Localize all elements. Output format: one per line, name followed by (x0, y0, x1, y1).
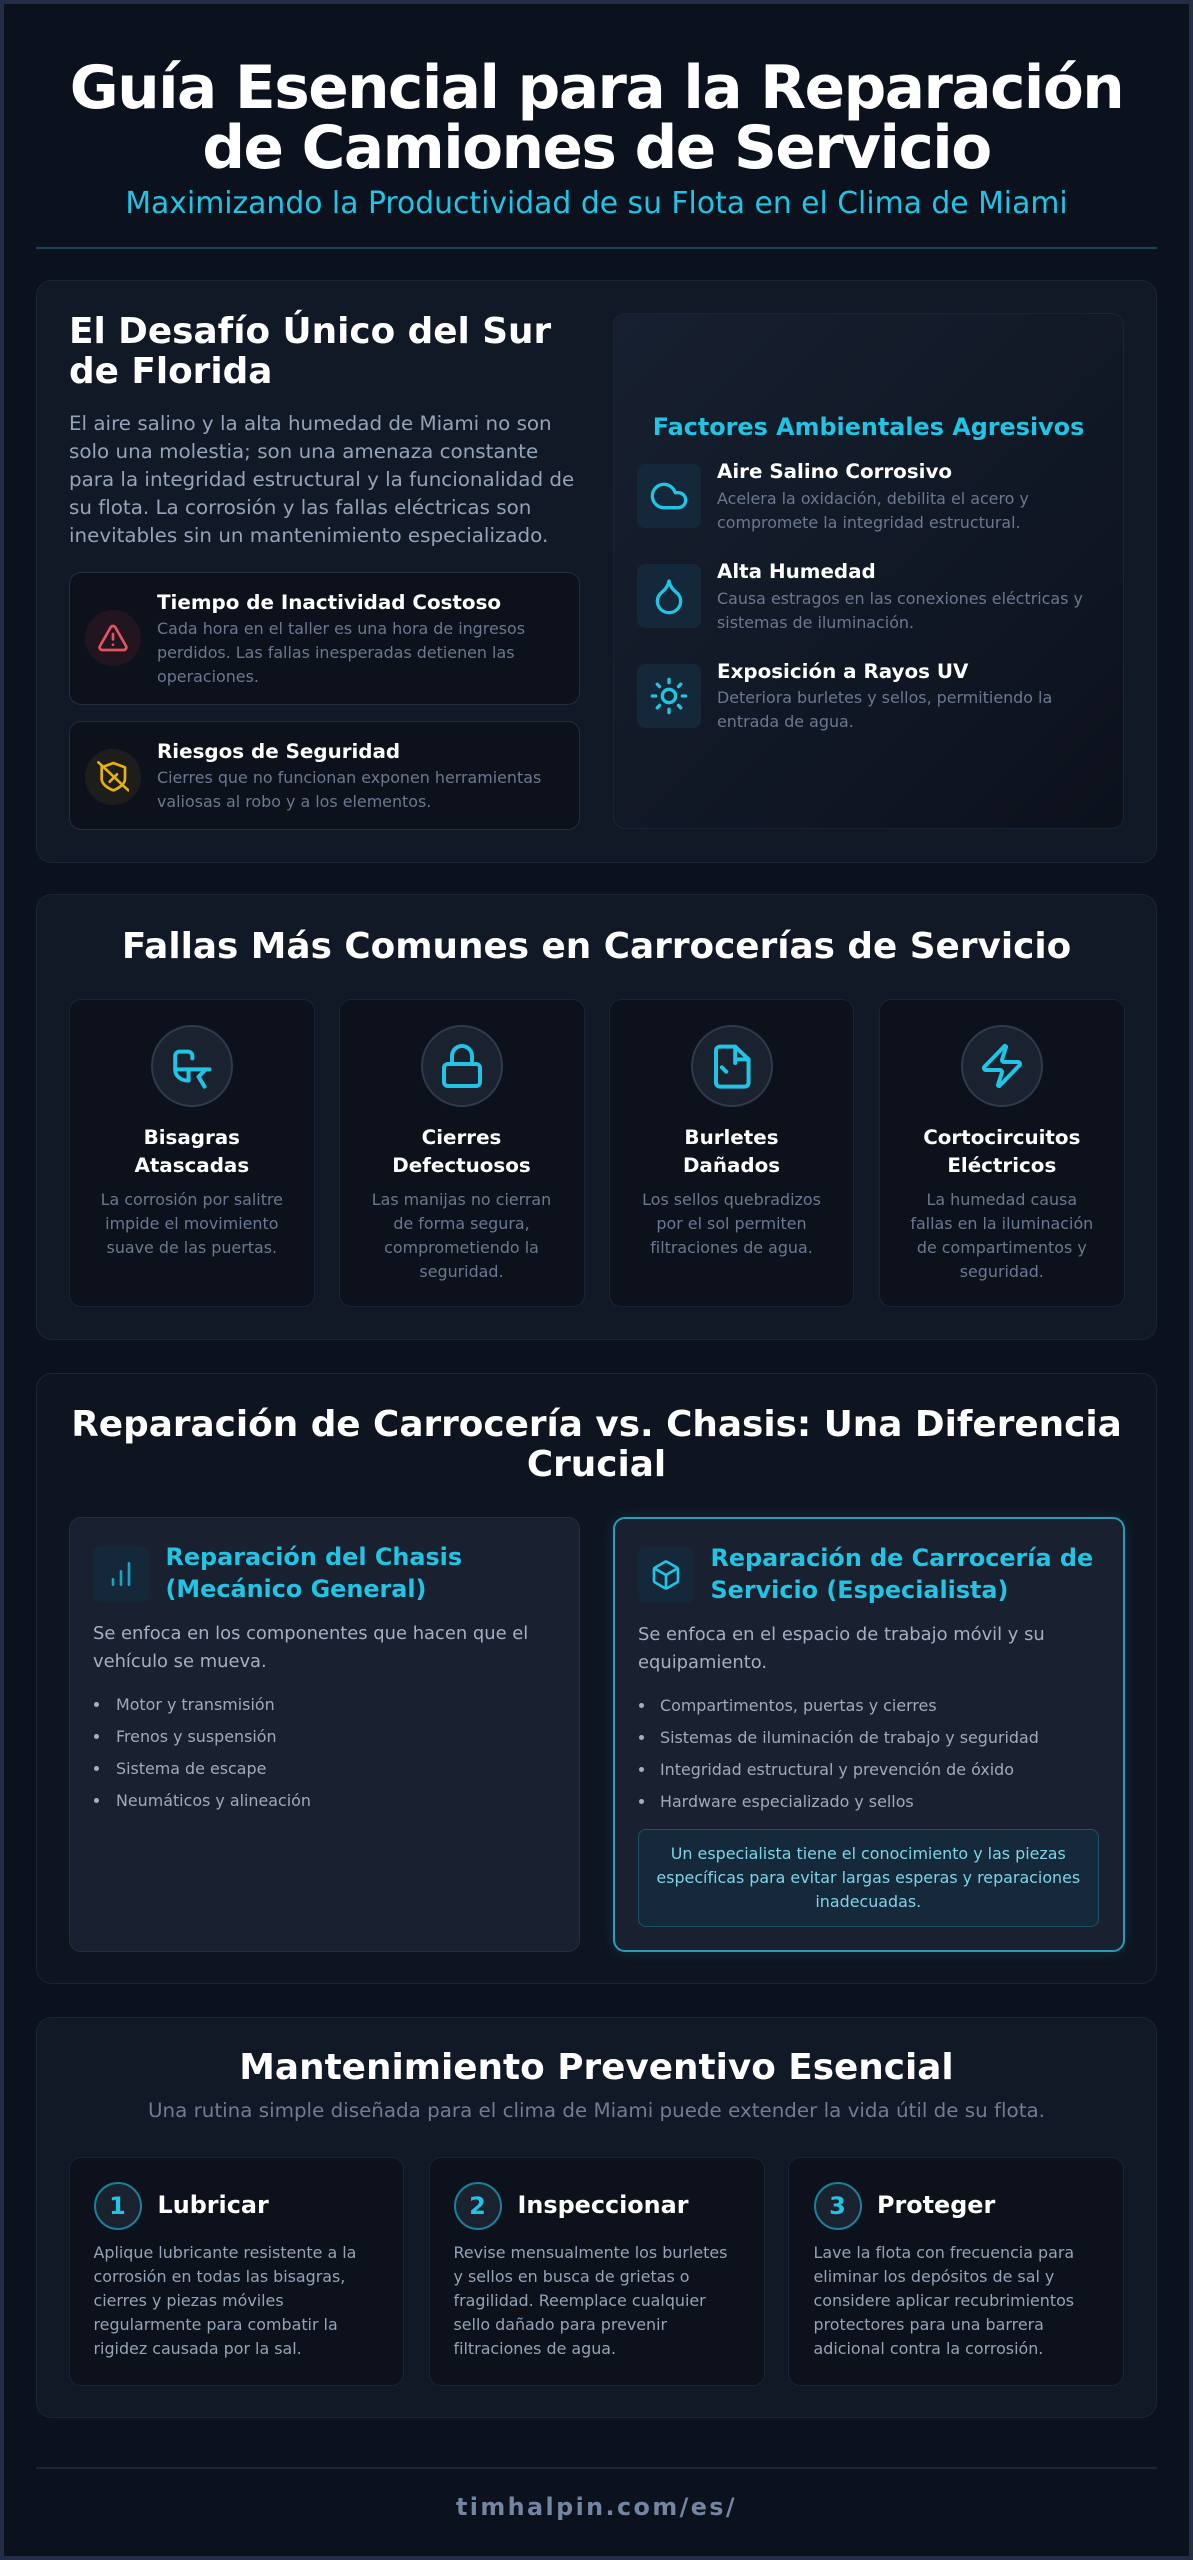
step number 1 (94, 2182, 142, 2230)
step text (454, 2243, 727, 2358)
failure title: Dañados (683, 1154, 780, 1177)
chassis text (93, 1623, 528, 1672)
step text: filtraciones de agua. (454, 2339, 616, 2358)
step text: cierres y piezas móviles (94, 2291, 284, 2310)
step number 1: 1 (109, 2192, 126, 2220)
failure title: Cortocircuitos (923, 1126, 1080, 1149)
header title (70, 54, 1123, 183)
failure text: seguridad. (960, 1262, 1044, 1280)
panel: Carrocería vs. Chasis (36, 1373, 1157, 1984)
failure title (392, 1126, 531, 1177)
alert text: operaciones. (157, 667, 259, 686)
failure text: Las manijas no cierran (372, 1190, 551, 1208)
callout text: específicas para evitar largas esperas y reparaciones (656, 1868, 1080, 1887)
chassis list: Motor y transmisión (116, 1695, 275, 1714)
header title: Guía Esencial para la Reparación (70, 54, 1123, 123)
step title: Proteger (877, 2190, 995, 2218)
card: Reparación de Carrocería (612, 1517, 1124, 1952)
step text: corrosión en todas las bisagras, (94, 2267, 345, 2286)
chassis text: vehículo se mueva. (93, 1651, 267, 1672)
callout (638, 1829, 1098, 1927)
alert text: Cada hora en el taller es una hora de ingresos (157, 619, 525, 638)
intro text: para la integridad estructural y la funcionalidad de (69, 468, 574, 491)
alert title: Riesgos de Seguridad (157, 740, 400, 762)
alert text (157, 619, 525, 686)
factor text: Deteriora burletes y sellos, permitiendo la (717, 688, 1052, 707)
failure text: Los sellos quebradizos (642, 1190, 821, 1208)
icon: bar chart (93, 1546, 149, 1602)
step text: Lave la flota con frecuencia para (814, 2243, 1074, 2262)
step text: fragilidad. Reemplace cualquier (454, 2291, 706, 2310)
factor title: Aire Salino Corrosivo (717, 460, 952, 483)
failure title: Bisagras (144, 1126, 240, 1149)
heading: Fallas Más Comunes: Fallas Más Comunes en Carrocerías de Servicio (122, 926, 1071, 967)
step text (94, 2243, 356, 2358)
heading: Carrocería vs. Chasis: Reparación de Carrocería vs. Chasis: Una Diferencia (71, 1404, 1122, 1445)
card: Reparación del Chasis (69, 1517, 580, 1952)
intro text: inevitables sin un mantenimiento especializado. (69, 524, 548, 547)
specialist text: Se enfoca en el espacio de trabajo móvil y su (638, 1624, 1045, 1645)
failure text: comprometiendo la (384, 1238, 539, 1256)
alert text: valiosas al robo y a los elementos. (157, 792, 431, 811)
failure title (683, 1126, 780, 1177)
failure title: Cierres (422, 1126, 501, 1149)
step text: regularmente para combatir la (94, 2315, 338, 2334)
card: Cierres Defectuosos (339, 999, 584, 1307)
failure text: fallas en la iluminación (910, 1214, 1093, 1232)
heading: El Desafío Único del Sur de Florida (69, 310, 552, 392)
specialist list: Sistemas de iluminación de trabajo y seguridad (660, 1728, 1039, 1747)
alert text: Cierres que no funcionan exponen herramientas (157, 768, 541, 787)
failure text: de forma segura, (393, 1214, 530, 1232)
specialist list (660, 1696, 1039, 1811)
footer url: timhalpin.com/es/ (456, 2493, 737, 2521)
failure text: La corrosión por salitre (101, 1190, 283, 1208)
chassis title (166, 1542, 462, 1602)
specialist title (710, 1544, 1093, 1604)
chassis text: Se enfoca en los componentes que hacen que el (93, 1623, 528, 1644)
factor text (717, 489, 1029, 532)
failure title (923, 1126, 1080, 1177)
heading: Factores Ambientales Agresivos: Factores Ambientales Agresivos (653, 413, 1084, 441)
alert text: perdidos. Las fallas inesperadas detienen las (157, 643, 514, 662)
icon: lightning bolt (961, 1025, 1043, 1107)
alert card: Tiempo de Inactividad (69, 572, 580, 705)
step text: y sellos en busca de grietas o (454, 2267, 690, 2286)
failure text (372, 1190, 551, 1280)
specialist title: Reparación de Carrocería de (710, 1544, 1093, 1572)
failure title: Defectuosos (392, 1154, 531, 1177)
failure text (101, 1190, 283, 1256)
panel: El Desafío Único (36, 280, 1157, 863)
chassis list: Frenos y suspensión (116, 1727, 277, 1746)
failure text: de compartimentos y (917, 1238, 1087, 1256)
card: Cortocircuitos Eléctricos (879, 999, 1124, 1307)
card: Lubricar (69, 2157, 404, 2386)
heading: Carrocería vs. Chasis (71, 1404, 1122, 1485)
step number 2 (454, 2182, 502, 2230)
failure text: impide el movimiento (105, 1214, 278, 1232)
failure title: Eléctricos (947, 1154, 1056, 1177)
specialist title: Servicio (Especialista) (710, 1576, 1008, 1604)
icon: cloud (637, 464, 701, 528)
failure text: filtraciones de agua. (650, 1238, 813, 1256)
chassis list: Sistema de escape (116, 1759, 266, 1778)
panel: Factores Ambientales (613, 313, 1124, 829)
header title: de Camiones de Servicio (202, 114, 991, 183)
heading: El Desafío Único del Sur de Florida: de Florida (69, 350, 272, 392)
icon: lock (420, 1025, 502, 1107)
specialist list: Compartimentos, puertas y cierres (660, 1696, 937, 1715)
step text: eliminar los depósitos de sal y (814, 2267, 1054, 2286)
icon: hinge (151, 1025, 233, 1107)
alert title: Tiempo de Inactividad Costoso (157, 590, 501, 614)
card: Inspeccionar (428, 2157, 764, 2386)
factor text: entrada de agua. (717, 712, 854, 731)
failure title (134, 1126, 249, 1177)
step text: protectores para una barrera (814, 2315, 1044, 2334)
alert text (157, 768, 541, 811)
intro text (69, 412, 574, 547)
chassis title: (Mecánico General) (166, 1574, 426, 1602)
specialist text: equipamiento. (638, 1652, 767, 1673)
icon: droplet (637, 564, 701, 628)
chassis title: Reparación del Chasis (166, 1542, 462, 1570)
factor text (717, 589, 1083, 632)
specialist text (638, 1624, 1045, 1673)
card: Bisagras Atascadas (69, 999, 314, 1307)
step text: Aplique lubricante resistente a la (94, 2243, 356, 2262)
step text: Revise mensualmente los burletes (454, 2243, 727, 2262)
panel: Fallas Más Comunes (36, 894, 1157, 1340)
intro text: El aire salino y la alta humedad de Miami no son (69, 412, 552, 435)
failure text: por el sol permiten (656, 1214, 807, 1232)
subheading: Una rutina simple diseñada para el clima de Miami puede extender la vida útil de su flota. (148, 2099, 1045, 2122)
step number 3: 3 (829, 2192, 846, 2220)
heading: El Desafío Único del Sur de Florida: El Desafío Único del Sur (69, 310, 551, 352)
heading: Carrocería vs. Chasis: Crucial (527, 1444, 666, 1485)
step text: adicional contra la corrosión. (814, 2339, 1043, 2358)
factor text: Causa estragos en las conexiones eléctricas y (717, 589, 1083, 608)
alert card: Riesgos de Seguridad (69, 721, 580, 830)
factor title: Alta Humedad (717, 560, 876, 583)
chassis list: Neumáticos y alineación (116, 1791, 311, 1810)
header subtitle: Maximizando la Productividad de su Flota en el Clima de Miami (125, 186, 1068, 221)
failure title: Burletes (684, 1126, 779, 1149)
icon: box (638, 1547, 694, 1603)
step text: considere aplicar recubrimientos (814, 2291, 1074, 2310)
card: Burletes Dañados (608, 999, 854, 1307)
failure text (642, 1190, 821, 1256)
factor text: compromete la integridad estructural. (717, 513, 1021, 532)
intro text: solo una molestia; son una amenaza constante (69, 440, 538, 463)
intro text: su flota. La corrosión y las fallas eléctricas son (69, 496, 531, 519)
factor title: Exposición a Rayos UV (717, 660, 968, 682)
icon: warning triangle (85, 610, 141, 666)
step number 3 (814, 2182, 862, 2230)
callout text (656, 1844, 1080, 1911)
step text: sello dañado para prevenir (454, 2315, 667, 2334)
specialist list: Integridad estructural y prevención de óxido (660, 1760, 1014, 1779)
card: Proteger (788, 2157, 1124, 2386)
icon: sun (637, 664, 701, 728)
chassis list (116, 1695, 311, 1810)
callout text: inadecuadas. (815, 1892, 921, 1911)
factor text: sistemas de iluminación. (717, 613, 914, 632)
step text: rigidez causada por la sal. (94, 2339, 302, 2358)
heading: Mantenimiento Preventivo Esencial: Mantenimiento Preventivo Esencial (239, 2046, 954, 2088)
failure title: Atascadas (134, 1154, 249, 1177)
callout text: Un especialista tiene el conocimiento y las piezas (671, 1844, 1066, 1863)
icon: document seal (691, 1025, 773, 1107)
failure text: La humedad causa (927, 1190, 1077, 1208)
step title: Inspeccionar (518, 2190, 689, 2218)
step number 2: 2 (469, 2192, 486, 2220)
failure text (910, 1190, 1093, 1280)
factor text (717, 688, 1052, 731)
factor text: Acelera la oxidación, debilita el acero y (717, 489, 1029, 508)
specialist list: Hardware especializado y sellos (660, 1792, 914, 1811)
step title: Lubricar (158, 2190, 269, 2218)
panel: Mantenimiento Preventivo (36, 2017, 1157, 2418)
failure text: seguridad. (419, 1262, 504, 1280)
failure text: suave de las puertas. (107, 1238, 277, 1256)
icon: shield off (85, 749, 141, 805)
step text (814, 2243, 1074, 2358)
